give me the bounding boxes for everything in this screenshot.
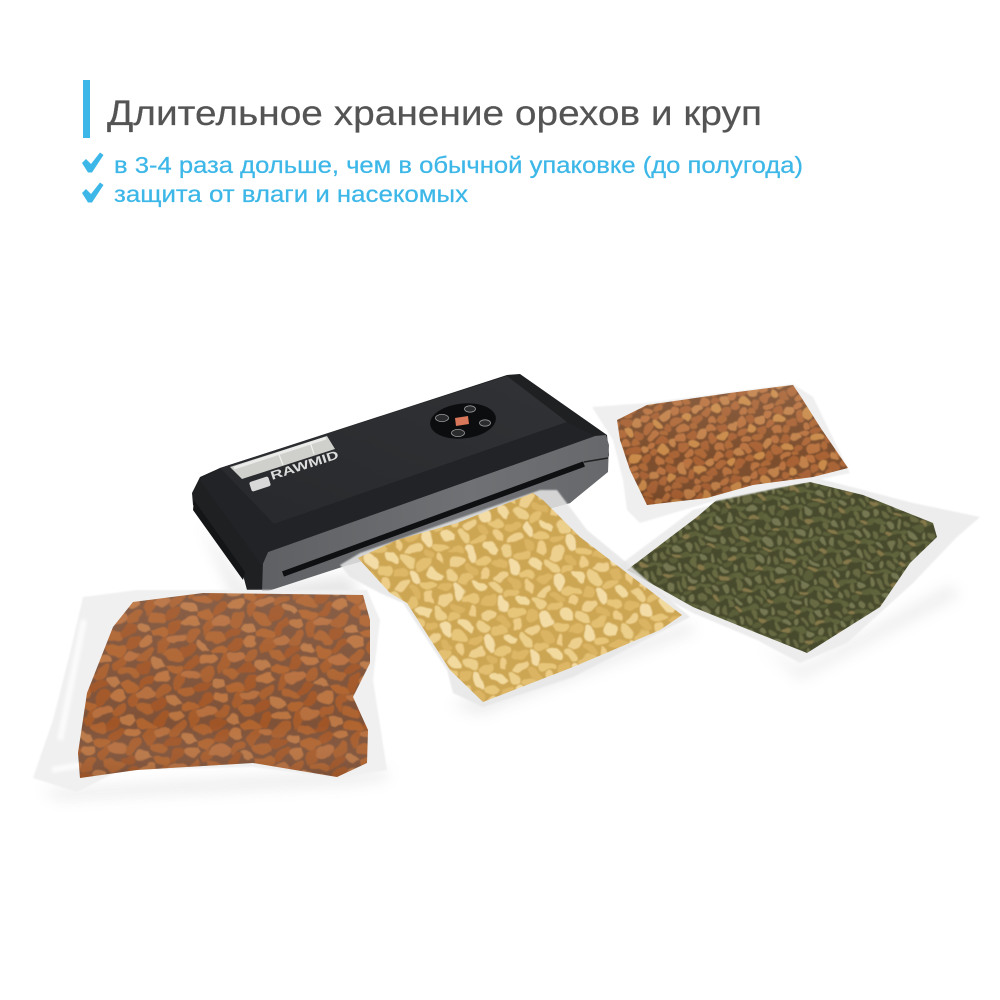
- benefits list: [82, 152, 803, 207]
- benefit text 1: в 3-4 раза дольше, чем в обычной упаковке (до полугода): [114, 152, 803, 178]
- bag slot: [283, 464, 584, 574]
- button minus: [464, 406, 476, 412]
- control panel: [428, 400, 498, 442]
- lid seam: [584, 458, 608, 462]
- clear window: [230, 436, 335, 479]
- button play: [452, 429, 464, 437]
- logo: RAWMID: [249, 447, 341, 492]
- nuts: [617, 385, 848, 505]
- bag: cashews: [340, 485, 695, 710]
- bag: pumpkin seeds: [626, 480, 979, 662]
- heading block: [83, 80, 762, 138]
- lid front lip: [200, 422, 595, 566]
- icon: check mark 2: [82, 182, 104, 202]
- button seal: [480, 420, 490, 426]
- film: [33, 590, 387, 792]
- film: [340, 490, 690, 707]
- cashews: [358, 493, 682, 702]
- ground shadows: [40, 520, 960, 800]
- seeds: [627, 482, 937, 653]
- benefit text 2: защита от влаги и насекомых: [114, 181, 468, 207]
- icon: check mark 1: [82, 152, 104, 172]
- film: [617, 477, 980, 663]
- lid top panel: [220, 376, 567, 524]
- film highlight: [52, 620, 120, 770]
- sealer base: [192, 374, 609, 590]
- logo badge: [249, 476, 271, 492]
- button plus: [436, 414, 448, 422]
- bag: almonds: [33, 585, 387, 792]
- title: Длительное хранение орехов и круп: [107, 94, 762, 133]
- panel disc: [428, 400, 498, 442]
- product: vacuum sealer: [192, 374, 609, 593]
- hinge side: [193, 500, 245, 580]
- bag: peanuts: [593, 384, 850, 522]
- front gray face: [262, 435, 609, 593]
- display: [455, 416, 469, 426]
- film: [592, 384, 850, 523]
- accent bar: [83, 80, 90, 138]
- logo wordmark: RAWMID: [269, 447, 341, 483]
- almonds: [78, 593, 370, 778]
- infographic canvas: [34, 80, 979, 798]
